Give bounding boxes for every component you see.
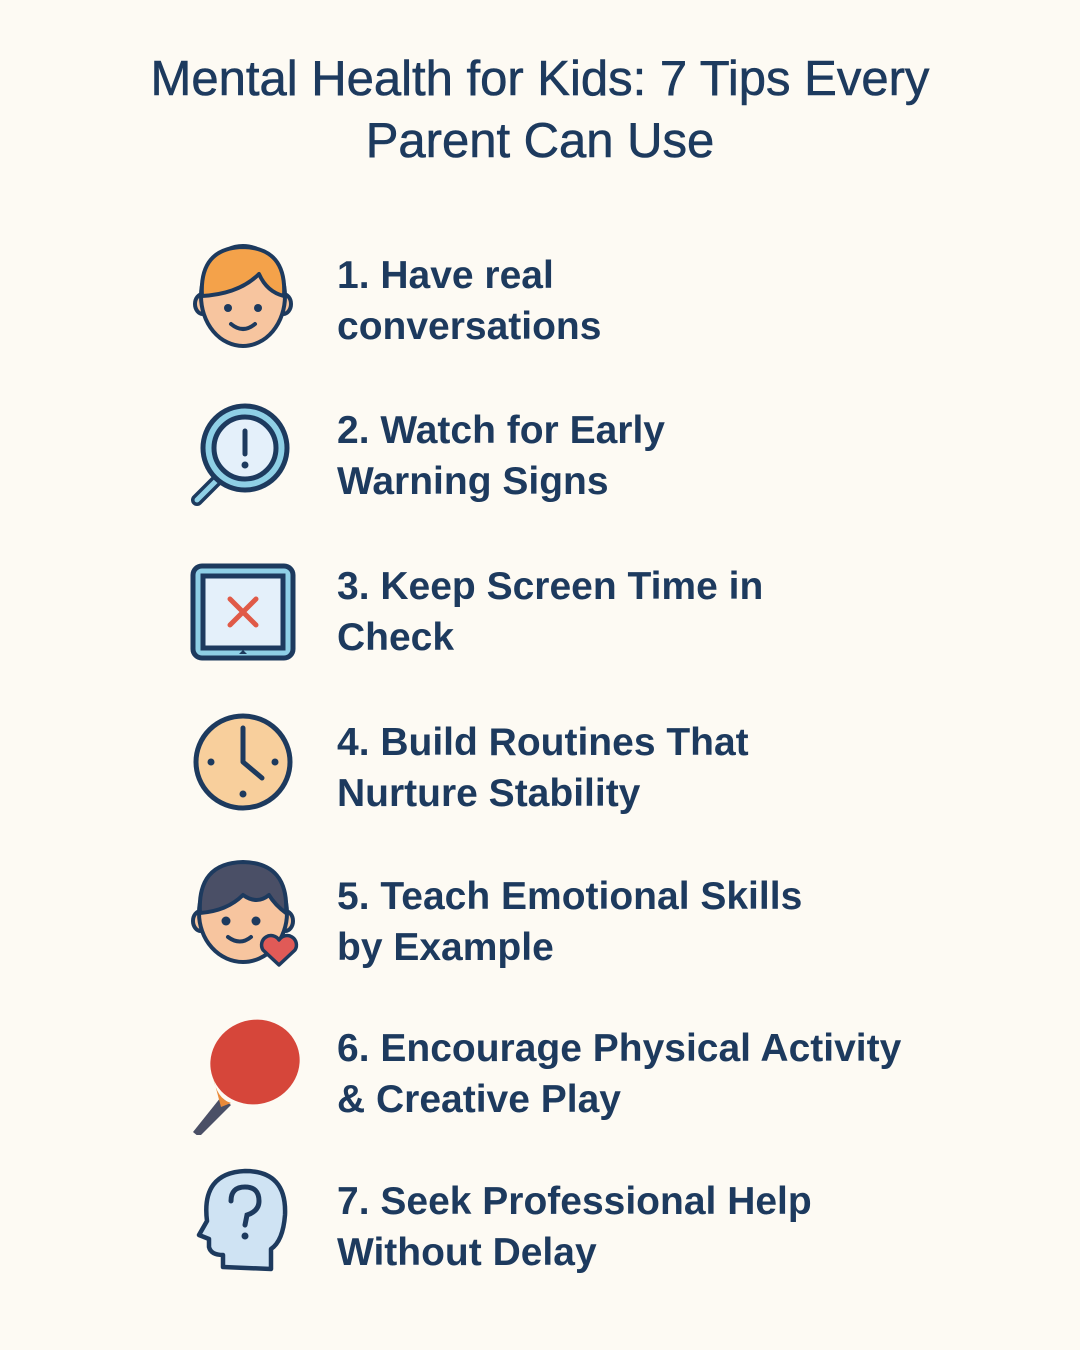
text: tip 2: [337, 409, 665, 503]
text: tip 1: [337, 254, 601, 348]
text: tip 5: [337, 875, 802, 969]
text: tip 6: 6. Encourage Physical Activity: [337, 1027, 901, 1070]
text: tip 7: [337, 1180, 812, 1274]
text: tip 1: 1. Have real: [337, 254, 554, 297]
text: tip 2: Warning Signs: [337, 460, 609, 503]
text: tip 3: 3. Keep Screen Time in: [337, 565, 763, 608]
text: tip 7: 7. Seek Professional Help: [337, 1180, 812, 1223]
text: tip 5: 5. Teach Emotional Skills: [337, 875, 802, 918]
icon: screen with X: [190, 564, 296, 660]
icon: ping pong paddle: [193, 1020, 300, 1135]
text: tip 2: 2. Watch for Early: [337, 409, 665, 452]
text: tip 4: 4. Build Routines That: [337, 721, 749, 764]
text: tip 7: Without Delay: [337, 1231, 597, 1274]
icon: child with heart: [191, 860, 298, 967]
text: tip 6: [337, 1027, 902, 1121]
icon: clock: [194, 714, 292, 810]
text: tip 5: by Example: [337, 926, 554, 969]
text: tip 4: Nurture Stability: [337, 772, 640, 815]
icon: boy face: [193, 244, 293, 348]
title: Mental Health for Kids: 7 Tips Every: [151, 52, 929, 106]
title: Parent Can Use: [366, 114, 714, 168]
text: tip 1: conversations: [337, 305, 601, 348]
title: [151, 52, 930, 168]
text: tip 4: [337, 721, 749, 815]
icon: head with question: [196, 1168, 288, 1272]
text: tip 6: & Creative Play: [337, 1078, 621, 1121]
text: tip 3: Check: [337, 616, 454, 659]
text: tip 3: [337, 565, 763, 659]
icon: magnifier: [191, 404, 290, 506]
